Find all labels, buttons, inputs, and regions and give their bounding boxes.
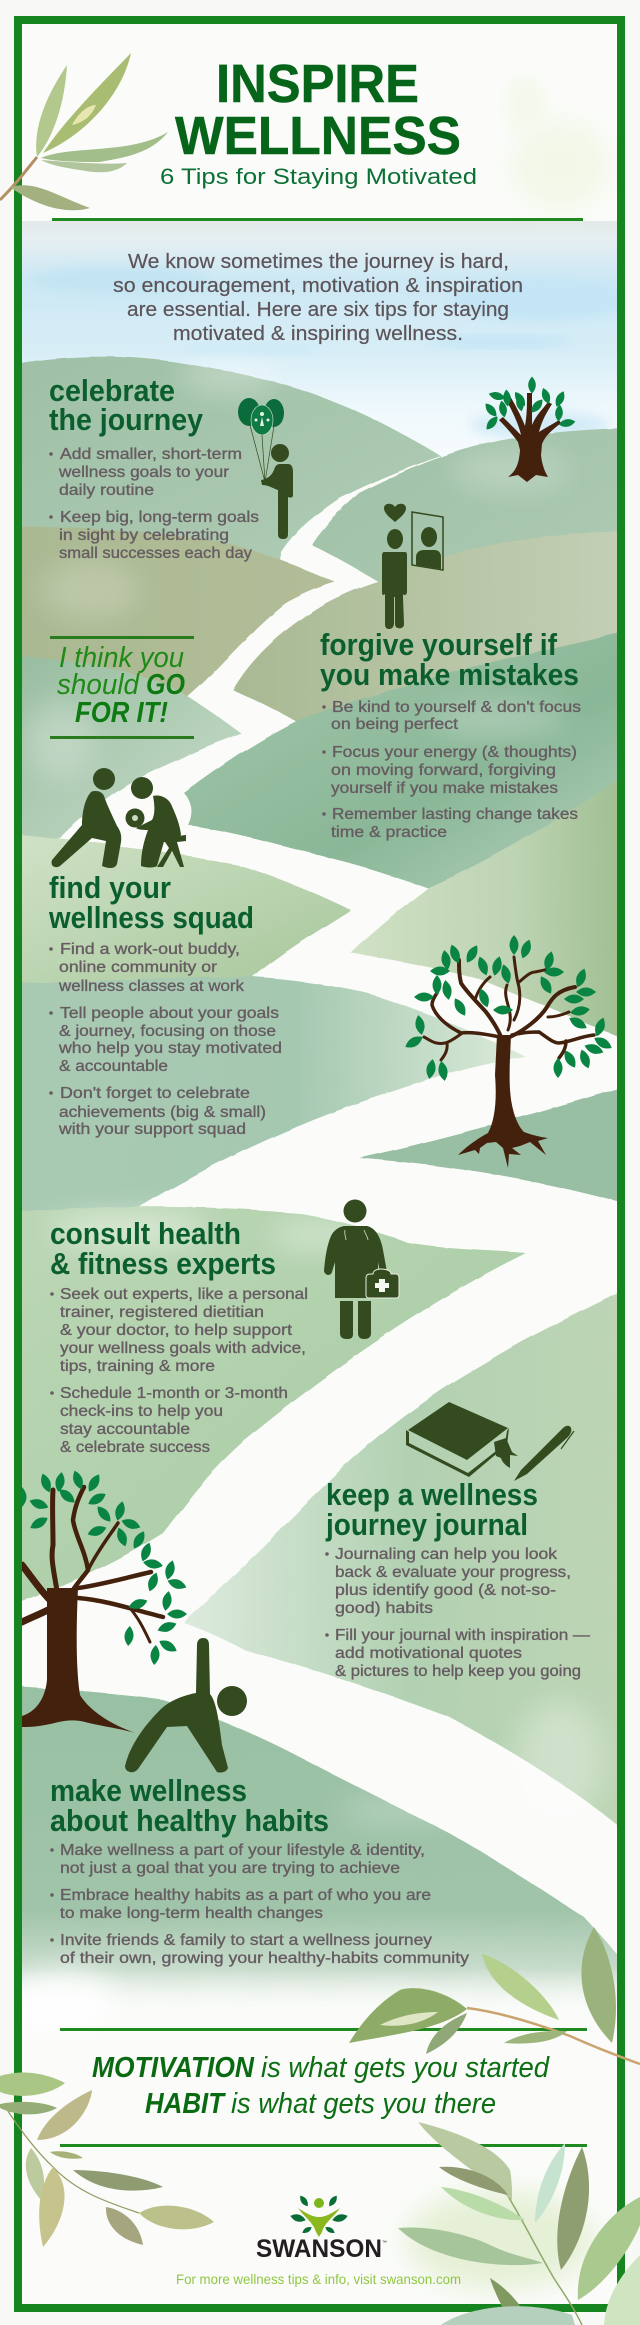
bullet list: & your doctor, to help support [60,1322,293,1339]
title: WELLNESS [175,106,461,166]
bullet list: Find a work-out buddy, [60,941,240,958]
leaves: lower right branch [349,1927,640,2064]
bullet list: not just a goal that you are trying to achieve [60,1860,400,1877]
bullet list: & accountable [59,1058,168,1075]
bullet list: Journaling can help you look [335,1546,557,1563]
heading: find your [49,870,171,905]
intro text: are essential. Here are six tips for staying [127,299,509,321]
bullet list: trainer, registered dietitian [60,1304,264,1321]
panel: keep a journal [325,1477,591,1680]
icon: left tree [18,1469,188,1733]
panel: make wellness about healthy habits [50,1773,469,1967]
heading [50,1216,276,1281]
bullet list: on being perfect [331,716,459,733]
closing quote: is what gets you there [231,2088,496,2120]
heading: forgive yourself if [320,627,558,662]
quote: I think you should go for it: GO [146,669,185,701]
quote: I think you should go for it: I think you [59,642,184,674]
heading [49,373,204,437]
leaves: bottom right sprig [398,2122,640,2325]
hill: consult [10,1207,526,1605]
bullet list: Embrace healthy habits as a part of who you are [60,1887,431,1904]
icon: workout buddies [52,768,186,868]
title [175,54,461,166]
hills [10,357,630,2015]
subtitle: 6 Tips for Staying Motivated [160,164,477,189]
hill: find your squad [10,835,351,990]
hill: olive right [233,530,630,724]
bullet list: Focus your energy (& thoughts) [332,744,577,761]
panel: consult experts [50,1216,308,1456]
bullet list: Invite friends & family to start a wellness journey [60,1932,432,1949]
heading: & fitness experts [50,1246,276,1281]
intro text [113,251,523,345]
icon: small tree [483,376,576,482]
bullet list: Add smaller, short-term [60,446,242,463]
bullet list [50,1842,469,1967]
hill: forgive [184,630,630,888]
bottom right pale wash [405,2190,595,2290]
quote: I think you should go for it [50,636,194,739]
icon: person with mirror and heart [382,504,443,629]
bullet list: with your support squad [58,1121,246,1138]
sky wash [22,221,630,461]
bullet list: achievements (big & small) [59,1104,266,1121]
watercolor mottling [5,357,605,2030]
closing quote: HABIT [145,2088,226,2120]
closing quote: MOTIVATION [92,2052,255,2084]
icon: big tree [403,935,614,1168]
bullet list: Remember lasting change takes [332,806,578,823]
panel: find your wellness squad [48,870,282,1138]
logo: Swanson [256,2194,387,2263]
panel: celebrate the journey [49,373,293,562]
hill: right band [351,770,630,1042]
bullet list: to make long-term health changes [60,1905,323,1922]
bullet list: Fill your journal with inspiration — [335,1627,591,1644]
bullet list: stay accountable [60,1421,190,1438]
bullet list: Seek out experts, like a personal [60,1286,308,1303]
quote: I think you should go for it: should [57,669,140,701]
panel: forgive yourself [320,627,581,841]
bullet list: check-ins to help you [60,1403,223,1420]
bullet list: who help you stay motivated [58,1040,282,1057]
hill: mid teal [10,977,526,1222]
logo: Swanson: ™ [382,2240,387,2246]
hill: left green [10,655,241,842]
hill: dark teal wedge [359,1090,617,1201]
logo: Swanson: SWANSON [256,2235,382,2263]
bullet list: add motivational quotes [335,1645,522,1662]
bullet list [50,1286,308,1456]
heading: you make mistakes [320,657,579,692]
bullet list [49,446,259,562]
icon: doctor [324,1200,399,1339]
quote: I think you should go for it: FOR IT! [75,697,168,729]
leaves: top left sprig [0,53,168,210]
bullet list: & journey, focusing on those [59,1023,276,1040]
bullet list: tips, training & more [60,1358,215,1375]
bullet list: plus identify good (& not-so- [335,1582,556,1599]
heading: consult health [50,1216,241,1251]
hill: olive left [10,526,335,700]
heading [325,1477,538,1542]
hill: upper right [312,428,617,582]
bullet list: of their own, growing your healthy-habits community [60,1950,469,1967]
intro text: We know sometimes the journey is hard, [128,251,509,273]
intro text: motivated & inspiring wellness. [173,323,463,345]
bullet list [325,1546,591,1680]
bullet list: wellness classes at work [58,978,244,995]
heading: celebrate [49,373,175,408]
bullet list: time & practice [331,824,447,841]
bullet list: daily routine [59,482,154,499]
heading: make wellness [50,1773,247,1808]
bullet list: on moving forward, forgiving [331,762,556,779]
bullet list: Keep big, long-term goals [60,509,259,526]
bullet list: yourself if you make mistakes [331,780,558,797]
bullet list: your wellness goals with advice, [60,1340,306,1357]
closing quote: is what gets you started [261,2052,550,2084]
leaves: lower left sprig [0,2072,214,2247]
bullet list: & celebrate success [60,1439,210,1456]
bullet list [49,941,282,1138]
heading [48,870,254,935]
hill: celebrate [22,356,442,560]
heading: journey journal [325,1507,528,1542]
bullet list: good) habits [335,1600,433,1617]
icon: person with balloons [238,398,293,539]
icon: yoga stretch figure [125,1638,247,1773]
closing quote [60,2028,587,2147]
bullet list: Schedule 1-month or 3-month [60,1385,288,1402]
bullet list: Be kind to yourself & don't focus [332,699,581,716]
title: INSPIRE [216,54,419,114]
icon: journal and pen [406,1402,574,1481]
top right pale foliage wash [503,75,610,210]
bullet list: in sight by celebrating [59,527,229,544]
heading: wellness squad [48,900,254,935]
bullet list: small successes each day [59,545,252,562]
bullet list: & pictures to help keep you going [335,1663,581,1680]
bullet list: Don't forget to celebrate [60,1085,250,1102]
bullet list: wellness goals to your [58,464,229,481]
hill: journal [184,1287,630,1835]
footer note: For more wellness tips & info, visit swanson.com [176,2271,461,2287]
bullet list: Tell people about your goals [60,1005,279,1022]
heading [320,627,579,692]
heading: about healthy habits [50,1803,329,1838]
bullet list [322,699,581,841]
hill: healthy habits [10,1686,630,2015]
bullet list: Make wellness a part of your lifestyle & identity, [60,1842,425,1859]
heading [50,1773,329,1838]
heading: the journey [49,402,204,437]
heading: keep a wellness [326,1477,538,1512]
bullet list: back & evaluate your progress, [335,1564,571,1581]
intro text: so encouragement, motivation & inspiration [113,275,523,297]
bullet list: online community or [59,959,217,976]
